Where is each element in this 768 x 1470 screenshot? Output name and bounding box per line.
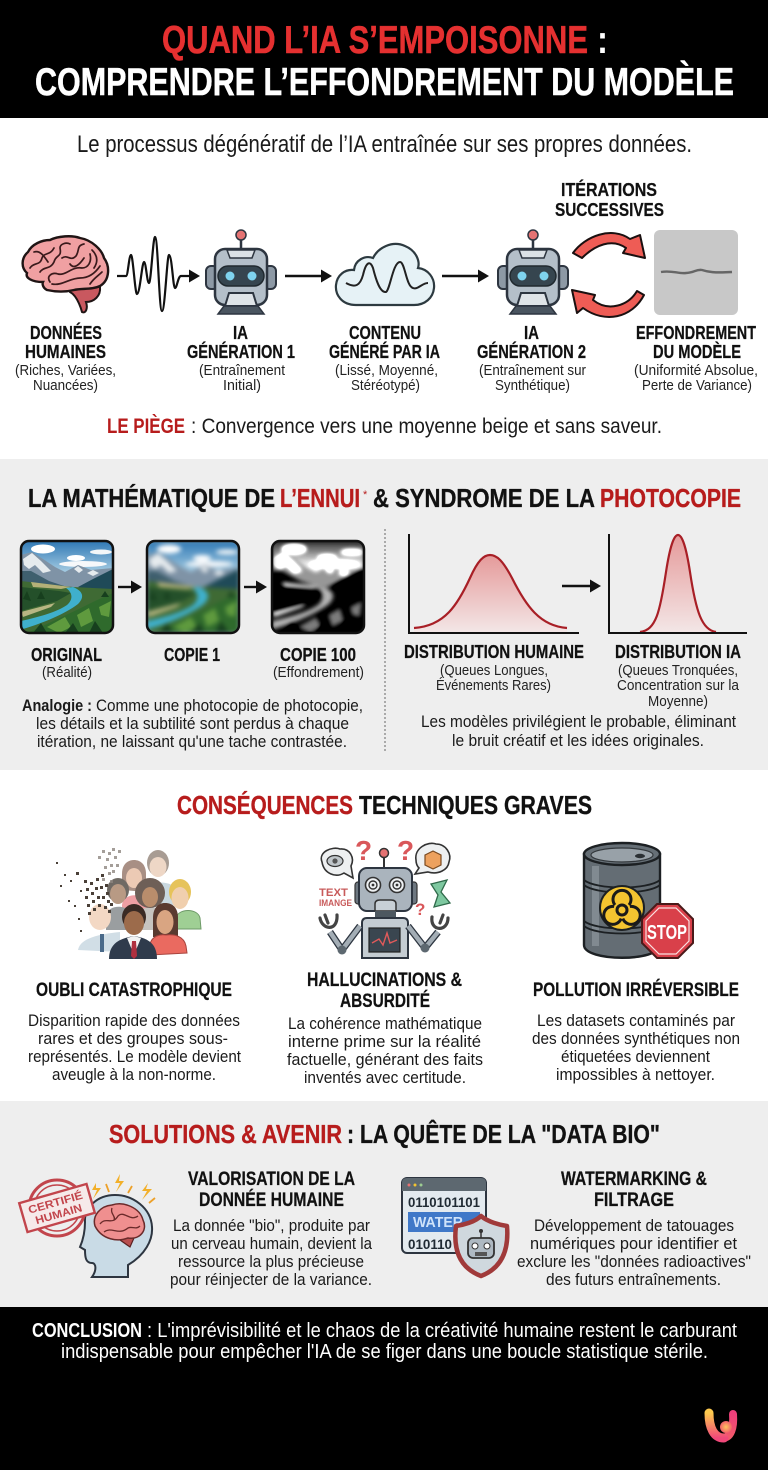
icon: certified human head: HUMAIN <box>34 1202 84 1227</box>
icon: robot generation 1 <box>206 230 276 314</box>
callout: the trap: : Convergence vers une moyenne beige et sans saveur. <box>191 415 662 438</box>
text: human data description: La donnée "bio", produite par <box>173 1216 370 1235</box>
text: hallucinations description: La cohérence mathématique <box>288 1014 482 1033</box>
heading <box>177 790 592 820</box>
heading: TECHNIQUES GRAVES <box>359 790 592 820</box>
heading: LA MATHÉMATIQUE DE <box>28 483 275 513</box>
text: human data description: pour réinjecter de la variance. <box>170 1270 372 1289</box>
label: model collapse: (Uniformité Absolue, <box>634 362 758 379</box>
label: AI generated content: Stéréotypé) <box>351 377 420 394</box>
label: iterations: ITÉRATIONS <box>561 179 657 200</box>
label: AI distribution: DISTRIBUTION IA <box>615 642 741 662</box>
heading: SOLUTIONS & AVENIR <box>109 1119 342 1149</box>
front man <box>109 904 157 959</box>
text: hallucinations description <box>287 1014 483 1087</box>
text: analogy: Analogie : <box>22 696 92 715</box>
label: human distribution: DISTRIBUTION HUMAINE <box>404 642 584 662</box>
icon: hallucinating robot: TEXT <box>319 887 348 899</box>
label: human data: Nuancées) <box>33 377 98 394</box>
panel: mathematics of boredom <box>0 459 768 770</box>
text: conclusion: indispensable pour empêcher l'IA de se figer dans une boucle statistique stérile. <box>61 1341 708 1363</box>
panel: conclusion <box>0 1307 768 1470</box>
heading: & SYNDROME DE LA <box>373 483 595 513</box>
label: model collapse: Perte de Variance) <box>642 377 752 394</box>
icon: watermark window with shield <box>402 1178 507 1276</box>
afro woman <box>135 878 166 930</box>
label: model collapse: DU MODÈLE <box>653 341 741 362</box>
text: human data description <box>170 1216 372 1289</box>
woman with long hair <box>122 860 148 922</box>
icon: logo <box>709 1413 733 1438</box>
label: iterations: SUCCESSIVES <box>555 200 664 220</box>
heading <box>109 1119 660 1149</box>
label: AI distribution: (Queues Tronquées, <box>618 662 738 679</box>
heading: * <box>363 489 368 501</box>
text: forgetting description: représentés. Le modèle devient <box>28 1047 241 1066</box>
text: hallucinations description: inventés avec certitude. <box>304 1068 466 1087</box>
text: forgetting description: rares et des groupes sous- <box>38 1029 228 1048</box>
icon: certified human head <box>19 1174 155 1277</box>
arrow <box>118 580 142 594</box>
icon: hallucinating robot: ? <box>355 835 372 866</box>
text: watermarking description <box>517 1216 751 1289</box>
icon: cloud with smoothed signal <box>336 244 434 305</box>
label: human data: (Riches, Variées, <box>15 362 116 379</box>
label: copy 100: COPIE 100 <box>280 645 356 665</box>
text: hallucinations description: factuelle, générant des faits <box>287 1050 483 1069</box>
text: forgetting description: Disparition rapide des données <box>28 1011 240 1030</box>
icon: hallucinating robot <box>319 835 450 958</box>
icon: toxic barrel and stop sign <box>584 843 693 958</box>
heading: CONSÉQUENCES <box>177 790 353 820</box>
label: AI distribution: Concentration sur la <box>617 677 740 694</box>
chart: AI distribution <box>609 534 747 633</box>
icon: hallucinating robot: ? <box>397 835 414 866</box>
label: hallucinations <box>307 970 462 1012</box>
label: AI generation 1: Initial) <box>223 377 261 394</box>
dissolving man <box>78 904 120 952</box>
text: forgetting description <box>28 1011 241 1084</box>
icon: toxic barrel and stop sign: STOP <box>647 922 687 944</box>
title: : <box>597 19 608 62</box>
label: human data valorisation: DONNÉE HUMAINE <box>199 1189 344 1211</box>
label: AI generation 1: GÉNÉRATION 1 <box>187 341 295 362</box>
label: AI generation 1: IA <box>233 323 248 343</box>
label: human data valorisation <box>188 1169 355 1211</box>
label: human data <box>15 322 116 394</box>
arrow <box>562 580 601 592</box>
icon: signal waveform arrow <box>117 237 200 311</box>
text: pollution description: impossibles à nettoyer. <box>556 1065 715 1084</box>
hourglass <box>431 880 450 907</box>
blond man <box>169 879 201 929</box>
label: human data: HUMAINES <box>25 342 106 362</box>
label: iterations <box>555 179 664 220</box>
icon: robot generation 2 <box>498 230 568 314</box>
text: models favour the probable <box>421 712 736 750</box>
label: copy 1: COPIE 1 <box>164 645 220 665</box>
text: analogy: les détails et la subtilité sont perdus à chaque <box>36 714 349 733</box>
thought bubble right <box>415 843 450 874</box>
text: watermarking description: Développement de tatouages <box>534 1216 734 1235</box>
back man <box>144 850 176 905</box>
heading <box>28 483 741 513</box>
label: AI generation 2: (Entraînement sur <box>479 362 586 379</box>
label: watermarking <box>561 1169 707 1211</box>
text: conclusion: CONCLUSION <box>32 1320 142 1342</box>
label: AI generated content: GÉNÉRÉ PAR IA <box>329 341 440 362</box>
icon: dissolving crowd <box>56 848 201 959</box>
heading: PHOTOCOPIE <box>600 483 741 513</box>
text: models favour the probable: Les modèles privilégient le probable, éliminant <box>421 712 736 731</box>
text: human data description: ressource la plus précieuse <box>178 1252 364 1271</box>
label: model collapse <box>634 323 758 394</box>
text: models favour the probable: le bruit créatif et les idées originales. <box>452 731 704 750</box>
label: original <box>31 645 102 681</box>
panel: solutions and future <box>0 1101 768 1307</box>
text: pollution description: étiquetées deviennent <box>561 1047 710 1066</box>
arrow <box>442 270 489 282</box>
label: AI generated content: (Lissé, Moyenné, <box>335 362 438 379</box>
text: forgetting description: aveugle à la non-norme. <box>52 1065 216 1084</box>
text: hallucinations description: interne prime sur la réalité <box>288 1032 481 1051</box>
image: original landscape <box>21 541 113 633</box>
image: copy 100 high contrast <box>272 541 364 633</box>
header band <box>0 0 768 118</box>
icon: collapsed flat signal <box>654 230 738 315</box>
icon: hallucinating robot: IMANGE <box>319 898 352 908</box>
icon: watermark window with shield: WATER <box>413 1214 463 1231</box>
label: AI generation 1: (Entraînement <box>199 362 286 379</box>
label: watermarking: FILTRAGE <box>594 1190 674 1211</box>
label: hallucinations: ABSURDITÉ <box>340 990 430 1012</box>
label: copy 100 <box>273 645 364 681</box>
text: watermarking description: numériques pour identifier et <box>530 1234 737 1253</box>
callout: the trap: LE PIÈGE <box>107 415 185 438</box>
text: analogy: itération, ne laissant qu'une tache contrastée. <box>37 732 347 751</box>
title: QUAND L’IA S’EMPOISONNE <box>162 19 588 62</box>
text: human data description: un cerveau humain, devient la <box>171 1234 372 1253</box>
label: human distribution <box>404 642 584 694</box>
arrow <box>285 270 332 282</box>
panel: pipeline flow <box>15 179 758 394</box>
icon: certified human head: CERTIFIÉ <box>27 1189 84 1217</box>
label: AI generated content: CONTENU <box>349 323 421 343</box>
robot body <box>320 848 448 958</box>
thought bubble left <box>321 848 353 878</box>
label: catastrophic forgetting: OUBLI CATASTROPHIQUE <box>36 980 232 1001</box>
title <box>35 19 734 104</box>
text: pollution description: des données synthétiques non <box>532 1029 740 1048</box>
icon: circular iteration arrows <box>572 233 645 317</box>
text: pollution description <box>532 1011 740 1084</box>
label: AI generation 2: IA <box>524 323 539 343</box>
heading: L’ENNUI <box>280 483 360 513</box>
label: human distribution: Événements Rares) <box>436 677 551 694</box>
label: hallucinations: HALLUCINATIONS & <box>307 970 462 991</box>
label: AI distribution: Moyenne) <box>648 693 708 710</box>
arrow <box>244 580 267 594</box>
label: AI generation 2: Synthétique) <box>495 377 570 394</box>
label: human data: DONNÉES <box>30 322 102 343</box>
label: AI distribution <box>615 642 741 710</box>
label: copy 100: (Effondrement) <box>273 664 364 681</box>
icon: human brain <box>23 236 108 312</box>
text: analogy <box>22 696 363 751</box>
text: pollution description: Les datasets contaminés par <box>537 1011 735 1030</box>
label: original: ORIGINAL <box>31 645 102 665</box>
text: watermarking description: exclure les "données radioactives" <box>517 1252 751 1271</box>
label: human distribution: (Queues Longues, <box>440 662 548 679</box>
label: AI generation 2: GÉNÉRATION 2 <box>477 341 586 362</box>
image: copy 1 blurred <box>147 541 239 633</box>
grey man <box>106 878 130 930</box>
label: human data valorisation: VALORISATION DE LA <box>188 1169 355 1190</box>
label: original: (Réalité) <box>42 664 92 681</box>
label: AI generated content <box>329 323 440 394</box>
text: analogy: Comme une photocopie de photocopie, <box>96 696 363 715</box>
label: AI generation 2 <box>477 323 586 394</box>
heading: : LA QUÊTE DE LA "DATA BIO" <box>347 1119 660 1149</box>
icon: watermark window with shield: 010110 <box>408 1236 452 1252</box>
label: AI generation 1 <box>187 323 295 394</box>
particles <box>56 862 113 932</box>
icon: watermark window with shield: 0110101101 <box>408 1194 480 1210</box>
label: watermarking: WATERMARKING & <box>561 1169 707 1190</box>
panel: technical consequences <box>28 790 740 1087</box>
front woman <box>150 903 187 955</box>
text: conclusion <box>32 1320 737 1363</box>
text: watermarking description: des futurs entraînements. <box>546 1270 721 1289</box>
icon: hallucinating robot: ? <box>415 900 425 919</box>
chart: human distribution <box>409 534 579 633</box>
